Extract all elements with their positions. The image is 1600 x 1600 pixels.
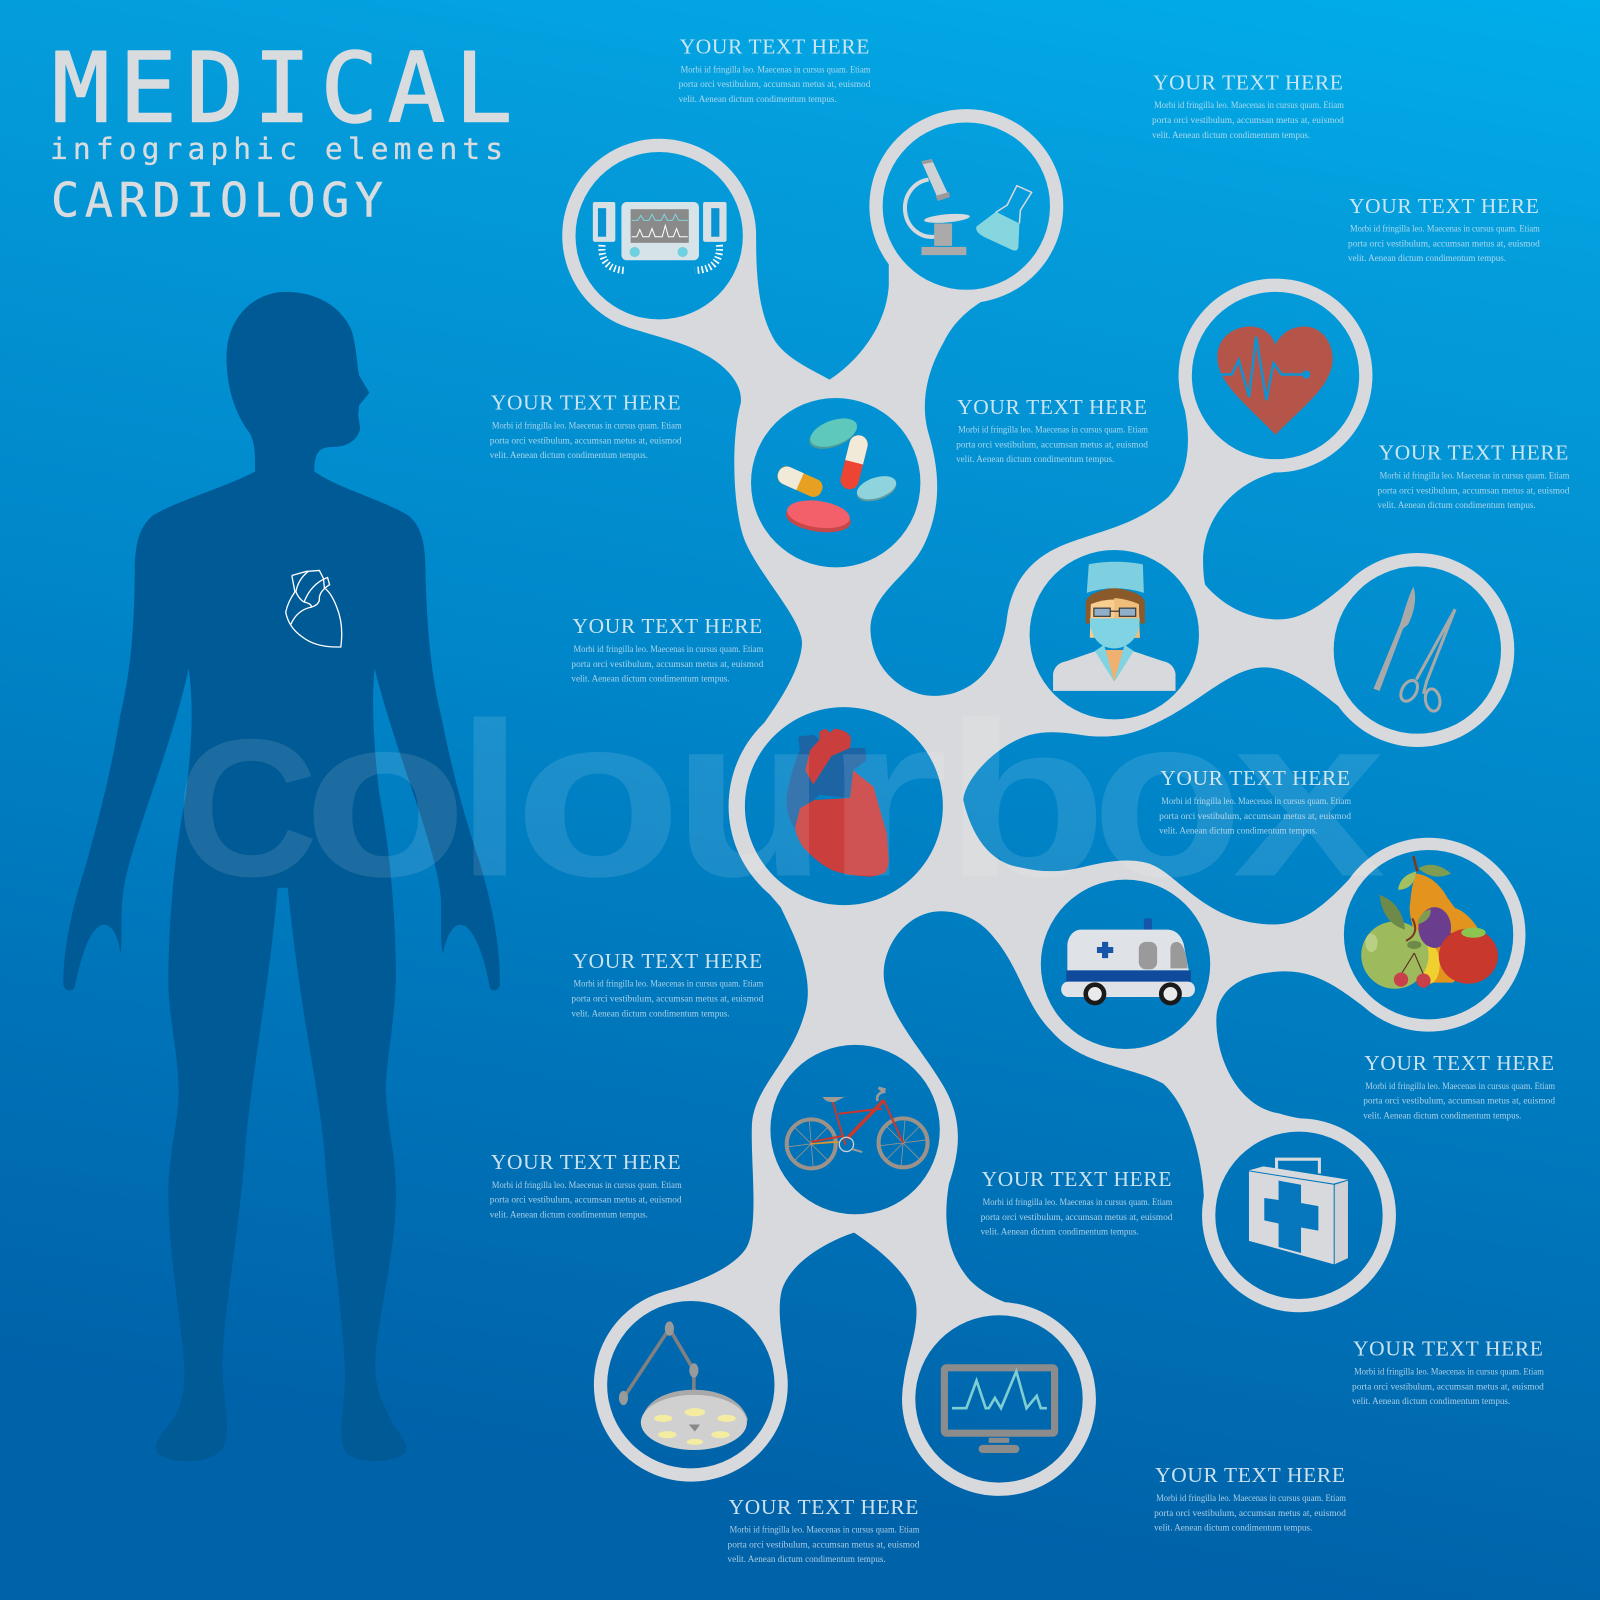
network body: [633, 206, 1429, 1399]
text block 14: Morbi id fringilla leo. Maecenas in cursus quam. Etiam: [1156, 1493, 1346, 1504]
text block 13: porta orci vestibulum, accumsan metus at, euismod: [1352, 1381, 1544, 1392]
text block 10: YOUR TEXT HERE: [1364, 1051, 1554, 1075]
text block 11: Morbi id fringilla leo. Maecenas in cursus quam. Etiam: [492, 1180, 682, 1191]
title: MEDICAL: MEDICAL: [52, 32, 522, 144]
text block 11: velit. Aenean dictum condimentum tempus.: [490, 1209, 648, 1220]
text block 14: porta orci vestibulum, accumsan metus at, euismod: [1154, 1508, 1346, 1519]
watermark: Colourbox: u: [673, 668, 827, 925]
text block 1: YOUR TEXT HERE: [680, 35, 869, 59]
text block 5: [956, 395, 1148, 465]
text block 5: velit. Aenean dictum condimentum tempus.: [956, 454, 1114, 465]
text block 2: porta orci vestibulum, accumsan metus at, euismod: [1152, 115, 1344, 126]
watermark: Colourbox: l: [457, 678, 522, 923]
watermark: Colourbox: o: [514, 668, 682, 925]
text block 7: velit. Aenean dictum condimentum tempus.: [571, 674, 730, 685]
icon: fruit: [1361, 856, 1498, 989]
title block: [50, 32, 522, 228]
watermark: Colourbox: x: [1233, 668, 1386, 925]
text block 6: porta orci vestibulum, accumsan metus at, euismod: [1378, 485, 1570, 496]
text block 8: velit. Aenean dictum condimentum tempus.: [1159, 826, 1317, 837]
text block 12: Morbi id fringilla leo. Maecenas in cursus quam. Etiam: [983, 1197, 1173, 1208]
text block 6: [1378, 441, 1570, 511]
text block 10: porta orci vestibulum, accumsan metus at, euismod: [1363, 1096, 1555, 1107]
icon: pills: [775, 413, 899, 536]
text block 9: YOUR TEXT HERE: [572, 949, 762, 973]
watermark: Colourbox: b: [944, 678, 1107, 923]
watermark: Colourbox: o: [1092, 668, 1243, 925]
text block 14: velit. Aenean dictum condimentum tempus.: [1154, 1523, 1312, 1534]
text block 15: Morbi id fringilla leo. Maecenas in cursus quam. Etiam: [730, 1525, 920, 1536]
text block 5: YOUR TEXT HERE: [957, 395, 1147, 419]
watermark: Colourbox: r: [821, 668, 949, 925]
text block 4: velit. Aenean dictum condimentum tempus.: [490, 450, 648, 461]
text block 9: porta orci vestibulum, accumsan metus at, euismod: [571, 994, 763, 1005]
text block 3: [1348, 194, 1540, 264]
text block 7: Morbi id fringilla leo. Maecenas in cursus quam. Etiam: [573, 644, 764, 655]
text block 13: Morbi id fringilla leo. Maecenas in cursus quam. Etiam: [1354, 1366, 1544, 1377]
icon: first aid kit: [1249, 1159, 1348, 1264]
human silhouette: [63, 292, 500, 1461]
text block 14: YOUR TEXT HERE: [1155, 1463, 1345, 1487]
icon: heart with pulse: [1217, 327, 1333, 435]
icon: ambulance: [1061, 918, 1195, 1003]
text block 15: [728, 1495, 920, 1565]
network of connected rings: [562, 109, 1526, 1496]
watermark: Colourbox: [176, 668, 1386, 925]
text block 12: porta orci vestibulum, accumsan metus at, euismod: [981, 1212, 1173, 1223]
text block 4: Morbi id fringilla leo. Maecenas in cursus quam. Etiam: [492, 421, 682, 432]
text block 9: velit. Aenean dictum condimentum tempus.: [571, 1008, 730, 1019]
icon: heart outline on chest: [286, 570, 342, 647]
subtitle: infographic elements: infographic elements: [50, 132, 508, 166]
text block 15: YOUR TEXT HERE: [729, 1495, 918, 1519]
text block 6: velit. Aenean dictum condimentum tempus.: [1378, 500, 1536, 511]
text block 12: YOUR TEXT HERE: [982, 1167, 1171, 1191]
icon: microscope and flask: [905, 159, 1032, 255]
icon: defibrillator: [593, 202, 727, 270]
text block 7: [571, 614, 764, 685]
text block 13: velit. Aenean dictum condimentum tempus.: [1352, 1396, 1510, 1407]
text block 10: [1363, 1051, 1556, 1121]
text block 1: Morbi id fringilla leo. Maecenas in cursus quam. Etiam: [681, 64, 871, 75]
text block 1: porta orci vestibulum, accumsan metus at, euismod: [679, 79, 871, 90]
text block 3: Morbi id fringilla leo. Maecenas in cursus quam. Etiam: [1350, 224, 1540, 235]
text block 1: velit. Aenean dictum condimentum tempus.: [679, 94, 837, 105]
text block 4: porta orci vestibulum, accumsan metus at, euismod: [490, 435, 682, 446]
text block 7: YOUR TEXT HERE: [572, 614, 762, 638]
text block 11: [490, 1150, 682, 1220]
watermark: Colourbox: C: [176, 699, 318, 918]
icon: scalpel and forceps: [1373, 587, 1455, 712]
icon: bicycle: [787, 1088, 928, 1168]
text block 3: YOUR TEXT HERE: [1349, 194, 1539, 218]
text block 15: porta orci vestibulum, accumsan metus at, euismod: [728, 1539, 920, 1550]
icon: surgical lamp: [619, 1321, 748, 1450]
text block 9: [571, 949, 764, 1019]
outer rings: [562, 109, 1526, 1496]
text block 15: velit. Aenean dictum condimentum tempus.: [728, 1554, 886, 1565]
text block 2: velit. Aenean dictum condimentum tempus.: [1152, 130, 1310, 141]
text block 13: YOUR TEXT HERE: [1353, 1337, 1543, 1361]
text block 12: velit. Aenean dictum condimentum tempus.: [981, 1227, 1139, 1238]
icon: anatomical heart: [787, 729, 889, 877]
text block 2: YOUR TEXT HERE: [1153, 70, 1343, 94]
text block 10: velit. Aenean dictum condimentum tempus.: [1363, 1110, 1521, 1121]
text block 8: YOUR TEXT HERE: [1160, 766, 1350, 790]
text block 5: Morbi id fringilla leo. Maecenas in cursus quam. Etiam: [958, 425, 1148, 436]
text block 13: [1352, 1337, 1544, 1407]
text block 8: porta orci vestibulum, accumsan metus at, euismod: [1159, 811, 1351, 822]
text block 1: [679, 35, 871, 105]
text block 4: [490, 391, 682, 461]
text block 2: Morbi id fringilla leo. Maecenas in cursus quam. Etiam: [1154, 100, 1344, 111]
ring openings: [576, 122, 1513, 1483]
subtitle: CARDIOLOGY: CARDIOLOGY: [51, 173, 389, 228]
text block 6: Morbi id fringilla leo. Maecenas in cursus quam. Etiam: [1380, 471, 1570, 482]
text block 3: porta orci vestibulum, accumsan metus at, euismod: [1348, 238, 1540, 249]
text block 7: porta orci vestibulum, accumsan metus at, euismod: [571, 659, 763, 670]
text block 11: porta orci vestibulum, accumsan metus at, euismod: [490, 1195, 682, 1206]
icon: doctor: [1053, 562, 1176, 691]
text block 12: [981, 1167, 1173, 1238]
text block 14: [1154, 1463, 1346, 1534]
watermark: Colourbox: o: [303, 668, 467, 925]
text block 2: [1152, 70, 1344, 141]
text block 5: porta orci vestibulum, accumsan metus at, euismod: [956, 439, 1148, 450]
text block 6: YOUR TEXT HERE: [1379, 441, 1568, 465]
text block 3: velit. Aenean dictum condimentum tempus.: [1348, 253, 1506, 264]
icon: ECG monitor: [944, 1368, 1055, 1453]
text block 11: YOUR TEXT HERE: [491, 1150, 681, 1174]
text block 4: YOUR TEXT HERE: [491, 391, 681, 415]
text block 9: Morbi id fringilla leo. Maecenas in cursus quam. Etiam: [573, 979, 764, 990]
text block 10: Morbi id fringilla leo. Maecenas in cursus quam. Etiam: [1365, 1081, 1556, 1092]
text block 8: [1159, 766, 1352, 837]
text block 8: Morbi id fringilla leo. Maecenas in cursus quam. Etiam: [1161, 796, 1352, 807]
